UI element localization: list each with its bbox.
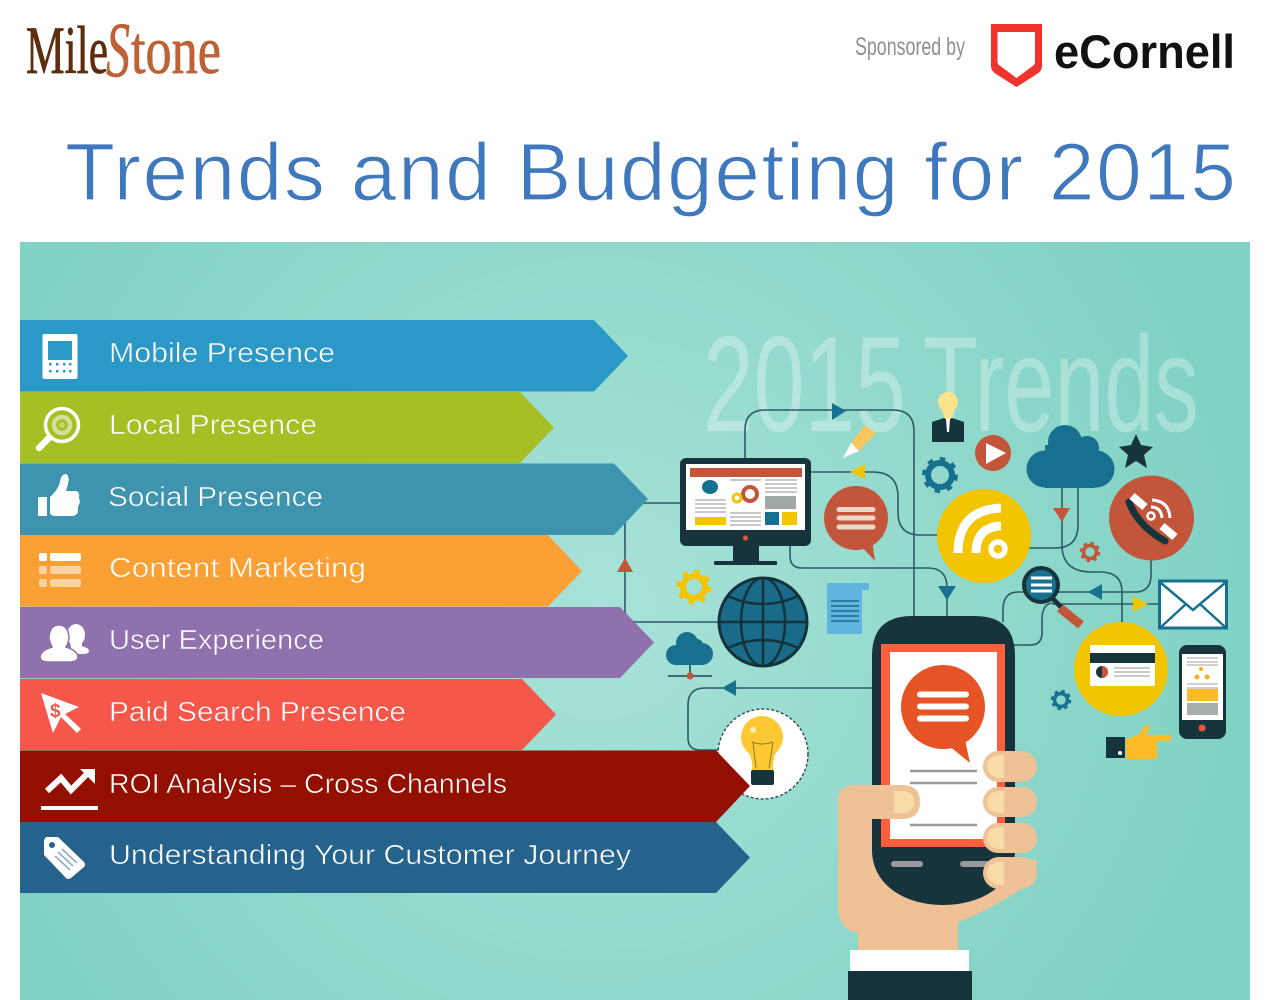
icon: businessman	[932, 392, 964, 442]
icon: mobile device	[42, 334, 78, 379]
icon: magnifier target	[39, 408, 78, 448]
icon: star	[1119, 434, 1153, 468]
icon: trend line	[41, 769, 98, 810]
arrow band 6: Paid Search Presence	[20, 679, 556, 750]
icon: small cloud network	[666, 632, 713, 680]
phone screen	[881, 644, 1005, 867]
icon: tag	[44, 837, 85, 879]
fingers	[983, 751, 1037, 889]
logo: MileStone	[26, 6, 221, 93]
logo: eCornell shield	[991, 24, 1042, 87]
icon: document	[827, 583, 869, 634]
sponsor text: Sponsored by	[855, 33, 965, 61]
icon: phone handset circle	[1109, 476, 1194, 560]
icon: magnifier	[1024, 568, 1081, 625]
phone body	[872, 616, 1015, 905]
logo: MileStone: S	[106, 6, 130, 93]
logo: eCornell wordmark: eCornell	[1054, 25, 1235, 78]
icon: wifi circle	[937, 489, 1031, 583]
arrow band 4: Content Marketing	[20, 535, 582, 606]
icon: yellow gear	[679, 572, 709, 602]
arrow band 3: Social Presence	[20, 464, 648, 535]
panel: teal background	[20, 242, 1250, 1000]
icon: envelope	[1160, 581, 1226, 628]
arrow band 5: User Experience: User Experience	[109, 624, 324, 655]
icon: play button	[975, 435, 1011, 471]
palm and wrist	[838, 785, 1037, 952]
logo: MileStone: Mile	[26, 12, 108, 88]
icon: lightbulb badge	[718, 709, 808, 799]
illustration: hand holding smartphone	[838, 616, 1037, 1000]
icon: cloud	[1026, 425, 1114, 488]
icon: search cursor	[41, 693, 81, 733]
arrow band 7: ROI Analysis: ROI Analysis – Cross Channels	[109, 768, 507, 799]
arrow band 8: Understanding Your Customer Journey: Understanding Your Customer Journey	[109, 839, 631, 870]
arrow band 2: Local Presence	[20, 392, 554, 463]
watermark: 2015 Trends	[703, 308, 1199, 460]
arrow band 6: Paid Search Presence: Paid Search Presence	[109, 696, 406, 727]
arrow band 4: Content Marketing: Content Marketing	[109, 552, 366, 583]
icon: small smartphone	[1179, 645, 1226, 739]
icon: speech bubble	[824, 486, 888, 561]
sleeve	[848, 971, 972, 1000]
logo: MileStone: tone	[131, 12, 221, 88]
watermark: 2015 Trends: 2015	[703, 308, 906, 460]
icon: globe	[719, 578, 807, 666]
arrow band 5: User Experience	[20, 607, 654, 678]
icon: users	[40, 624, 89, 662]
icon: pencil	[843, 425, 876, 458]
icon: thumbs up	[38, 474, 80, 516]
arrow band 1: Mobile Presence: Mobile Presence	[109, 337, 335, 368]
arrow band 2: Local Presence: Local Presence	[109, 409, 317, 440]
icon: list	[39, 553, 81, 587]
title: Trends and Budgeting for 2015	[65, 127, 1236, 218]
connector lines and arrowheads	[617, 403, 1160, 750]
icon: small red gear	[1081, 543, 1099, 561]
arrow band 7: ROI Analysis	[20, 750, 750, 822]
icon: blue gear	[924, 459, 956, 491]
arrow band 8: Understanding Your Customer Journey	[20, 822, 750, 893]
icon: pointing hand	[1106, 725, 1172, 759]
arrow band 1: Mobile Presence	[20, 320, 628, 392]
icon: credit card circle	[1074, 622, 1168, 716]
icon: small blue gear	[1052, 691, 1070, 709]
thumb	[860, 785, 920, 819]
icon: search cursor: $	[50, 701, 61, 722]
icon: desktop monitor	[680, 458, 811, 565]
cuff	[850, 950, 969, 971]
arrow band 3: Social Presence: Social Presence	[108, 481, 323, 512]
